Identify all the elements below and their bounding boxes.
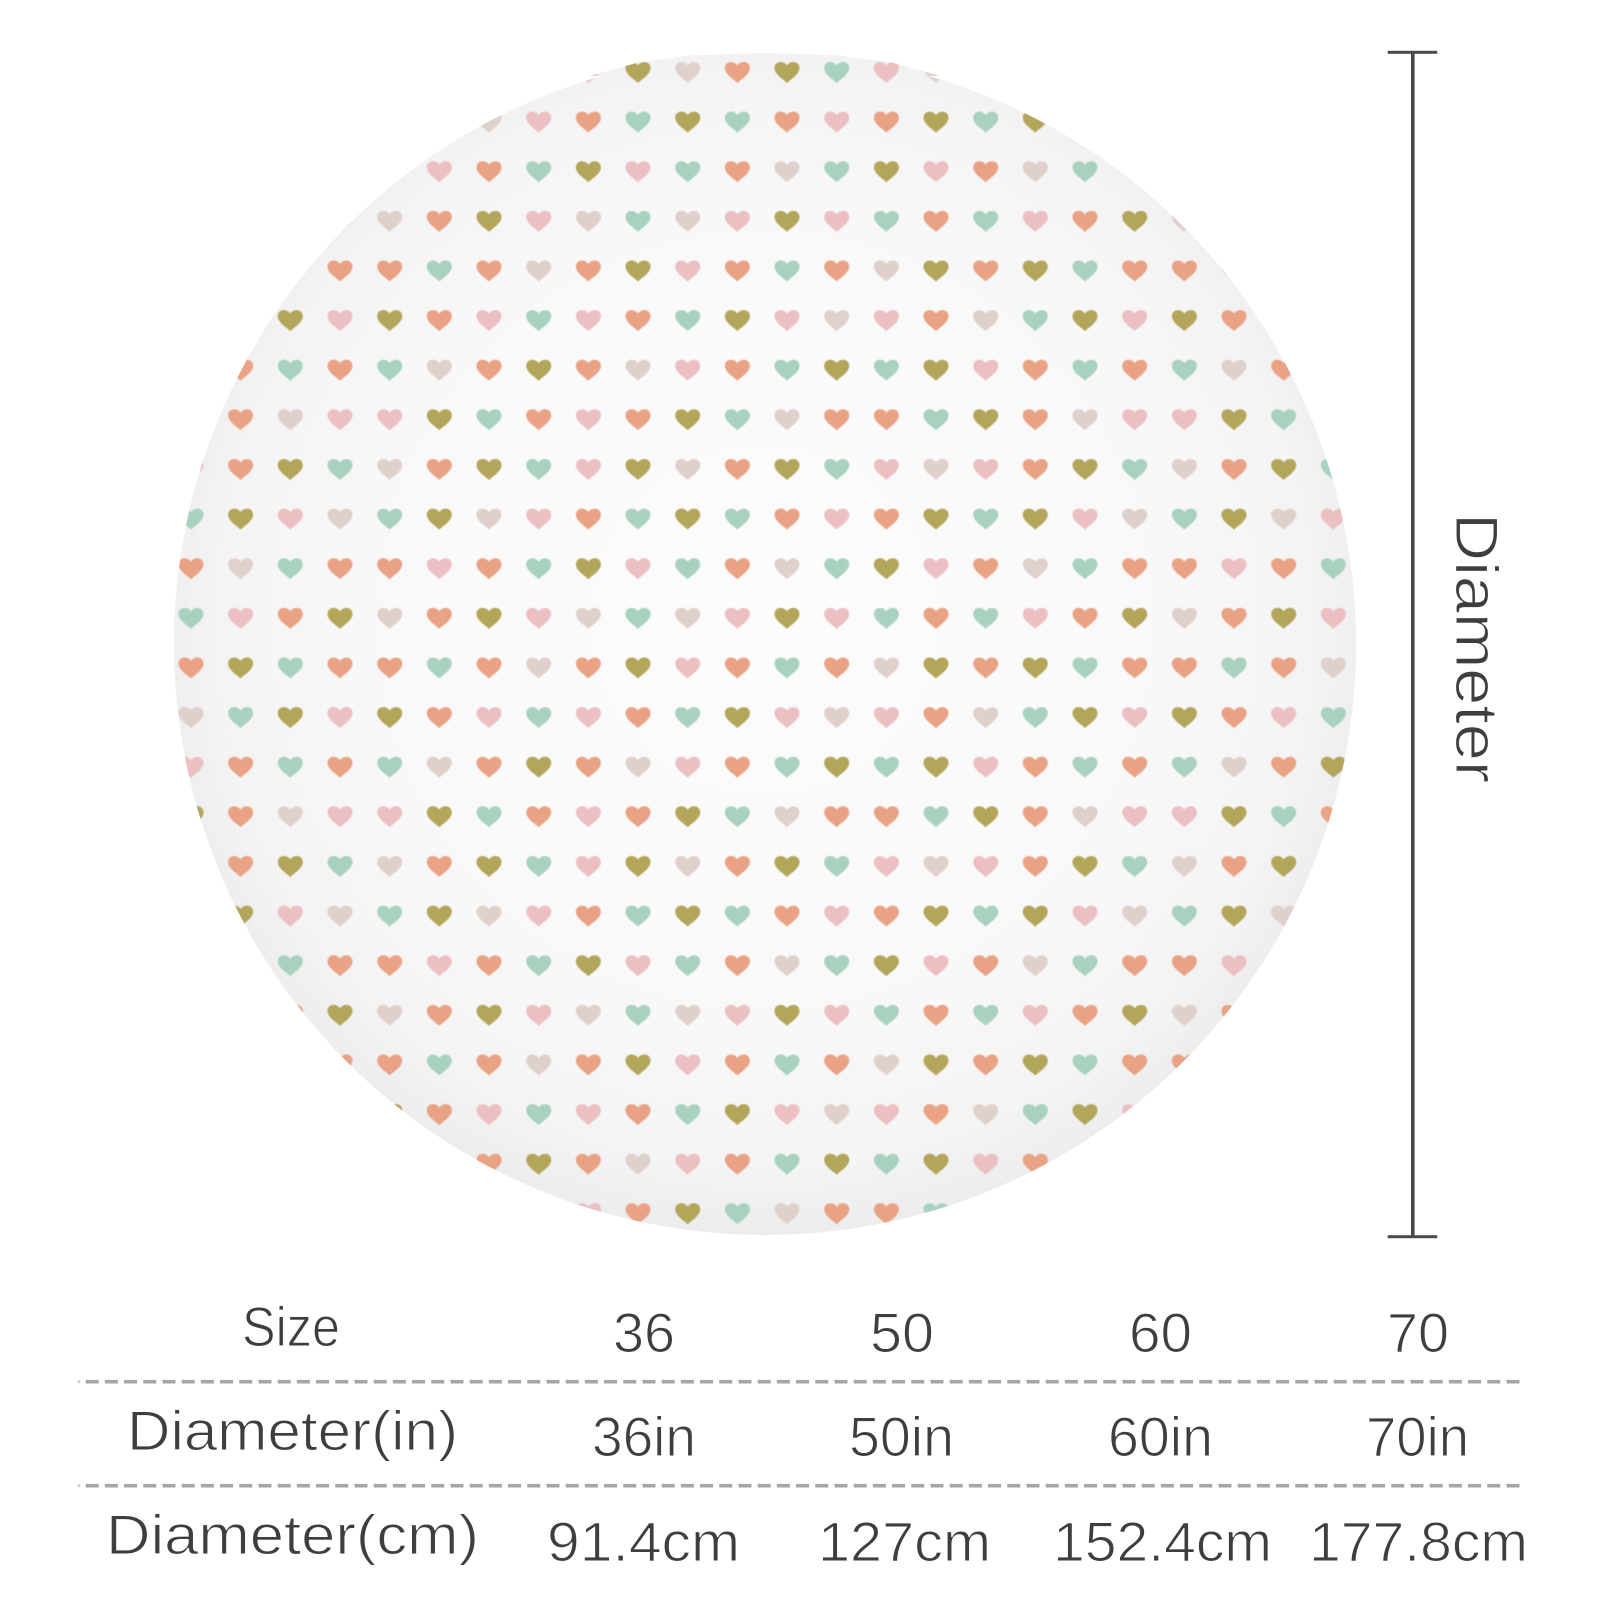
row: size: Size: [242, 1295, 340, 1358]
row: size: 70: [1387, 1301, 1449, 1364]
row: diameter in inches: Diameter(in): [127, 1399, 458, 1462]
row: diameter in centimetres: Diameter(cm): [106, 1503, 479, 1566]
round rug with heart pattern: [174, 53, 1356, 1235]
row: size: 36: [613, 1301, 675, 1364]
row: size: [242, 1295, 1449, 1364]
row: diameter in centimetres: 91.4cm: [547, 1510, 740, 1573]
row: diameter in inches: 70in: [1366, 1405, 1469, 1468]
row: diameter in centimetres: 152.4cm: [1053, 1510, 1272, 1573]
row: size: 50: [870, 1301, 934, 1364]
row: diameter in inches: 50in: [849, 1405, 954, 1468]
row: diameter in inches: 36in: [592, 1405, 696, 1468]
row: diameter in centimetres: [106, 1503, 1528, 1573]
row: diameter in centimetres: 127cm: [818, 1510, 991, 1573]
row: size: 60: [1129, 1301, 1192, 1364]
row: diameter in inches: 60in: [1108, 1405, 1213, 1468]
divider: [78, 1380, 1520, 1383]
divider: [78, 1484, 1520, 1487]
size table: [78, 1295, 1528, 1573]
row: diameter in centimetres: 177.8cm: [1309, 1510, 1528, 1573]
diameter vertical label: Diameter: [1443, 513, 1510, 783]
row: diameter in inches: [127, 1399, 1469, 1468]
diameter dimension bracket: [1388, 51, 1437, 1238]
